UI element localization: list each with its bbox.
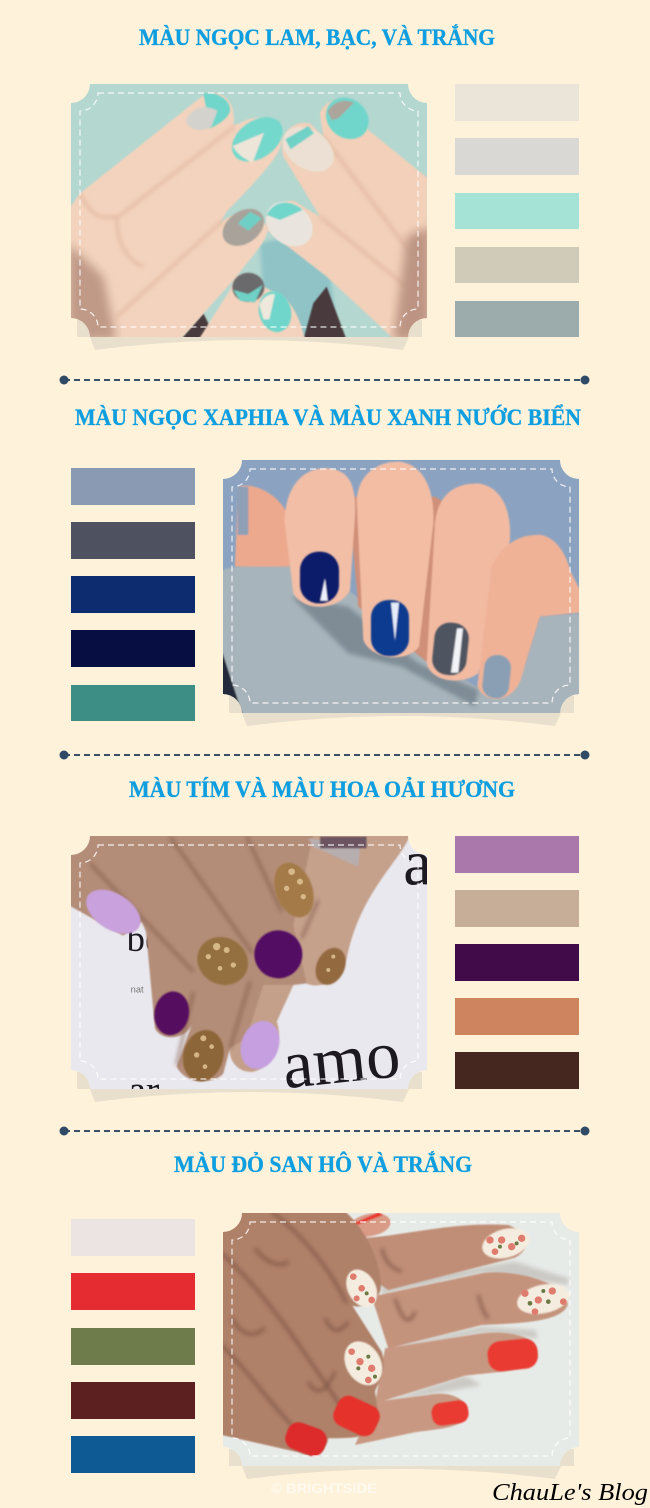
nails	[203, 93, 230, 128]
photo frame backing	[77, 320, 422, 350]
printed letters in photo: ar	[128, 1067, 159, 1112]
photo: blue nails on denim	[223, 460, 579, 713]
photo: coral and floral nails	[223, 1213, 579, 1466]
printed letters in photo	[129, 854, 427, 1089]
printed letters in photo: nat	[131, 985, 144, 995]
photo: turquoise nail art	[71, 84, 427, 337]
dashed stitching	[80, 93, 418, 327]
photo frame backing	[77, 1072, 422, 1102]
nails	[85, 888, 142, 934]
watermark: © BRIGHTSIDE	[271, 1480, 377, 1496]
printed letters in photo: a	[403, 827, 432, 899]
skin shading	[80, 126, 413, 317]
blog signature: ChauLe's Blog	[492, 1480, 648, 1506]
swatches: coral palette	[71, 1219, 195, 1473]
printed letters in photo: amo	[279, 1015, 404, 1103]
heading: turquoise, silver and white: MÀU NGỌC LAM, BẠC, VÀ TRẮNG	[139, 24, 495, 50]
dashed stitching	[232, 469, 570, 703]
divider 1	[60, 376, 590, 384]
photo frame backing	[229, 696, 574, 726]
panel: coral nails photo	[223, 1213, 579, 1479]
printed letters in photo: be	[127, 918, 161, 959]
swatches: sapphire palette	[71, 468, 195, 721]
divider 3	[60, 1126, 590, 1136]
glitter	[194, 868, 335, 1069]
dashed stitching	[232, 1222, 570, 1456]
nails	[300, 552, 339, 603]
floral dots	[348, 1235, 567, 1383]
panel: turquoise nails photo	[71, 84, 427, 350]
nails	[486, 1337, 539, 1372]
dashed stitching	[80, 845, 418, 1079]
photo: purple and gold nails	[71, 836, 427, 1089]
skin creases	[222, 1212, 488, 1425]
photo frame backing	[229, 1449, 574, 1479]
finger seams	[90, 837, 318, 1065]
heading: sapphire and navy: MÀU NGỌC XAPHIA VÀ MÀU XANH NƯỚC BIỂN	[75, 404, 581, 430]
heading: purple and lavender: MÀU TÍM VÀ MÀU HOA OẢI HƯƠNG	[129, 777, 515, 802]
swatches: purple palette	[455, 836, 579, 1089]
heading: coral red and white: MÀU ĐỎ SAN HÔ VÀ TRẮNG	[174, 1151, 472, 1177]
divider 2	[60, 750, 590, 760]
panel: purple nails photo	[71, 836, 427, 1102]
panel: sapphire nails photo	[223, 460, 579, 726]
swatches: turquoise palette	[455, 84, 579, 337]
